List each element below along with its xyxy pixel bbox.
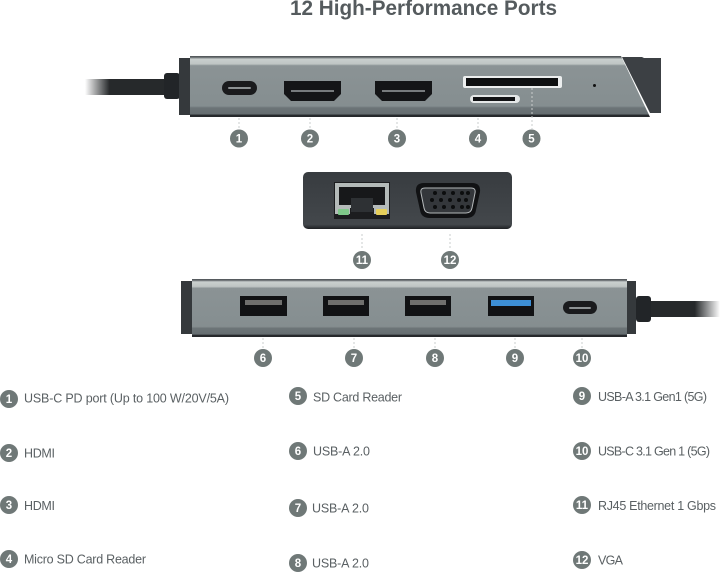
legend item 12 <box>573 551 624 569</box>
leader lines: top device <box>239 88 532 129</box>
legend item 12: VGA <box>598 554 624 568</box>
cable: left <box>85 79 167 95</box>
end cap: right <box>626 281 636 334</box>
badge 6: 6 <box>260 353 266 365</box>
port: SD card reader <box>463 76 562 88</box>
port: USB-A 3.1 blue <box>488 296 534 316</box>
badge 7 <box>345 349 363 367</box>
badge 2 <box>301 130 319 148</box>
legend item 9 <box>573 387 707 405</box>
legend item 10 <box>573 442 710 460</box>
badge 5 <box>522 130 540 148</box>
legend item 5: SD Card Reader <box>313 390 402 404</box>
badge 9 <box>506 349 524 367</box>
legend item 10: 10 <box>576 446 588 458</box>
legend item 8: 8 <box>295 558 302 570</box>
legend item 7: USB-A 2.0 <box>312 502 369 516</box>
housing <box>192 279 627 337</box>
legend item 7: 7 <box>295 503 301 515</box>
legend item 2 <box>0 444 55 462</box>
port: USB-C <box>563 301 597 314</box>
legend item 6 <box>289 442 370 460</box>
badge 4 <box>469 130 487 148</box>
legend item 1 <box>0 390 229 408</box>
legend item 10: USB-C 3.1 Gen 1 (5G) <box>598 444 710 458</box>
port: USB-A 2.0 <box>323 296 369 316</box>
end cap: left <box>179 58 191 115</box>
leader lines: middle device <box>362 234 450 250</box>
legend item 1: 1 <box>6 394 13 406</box>
port: HDMI <box>375 81 432 101</box>
legend item 9: 9 <box>579 391 585 403</box>
legend item 12: 12 <box>576 555 588 567</box>
badge 12: 12 <box>444 255 456 267</box>
legend item 8 <box>289 554 369 572</box>
badge 10 <box>573 349 591 367</box>
legend item 5 <box>289 387 402 405</box>
badge 5: 5 <box>528 134 535 146</box>
housing <box>303 172 512 229</box>
port: USB-C <box>222 81 257 95</box>
legend item 4: Micro SD Card Reader <box>24 552 146 566</box>
port: HDMI <box>284 81 341 101</box>
badge 4: 4 <box>475 134 482 146</box>
badge 11: 11 <box>356 255 369 267</box>
legend item 4 <box>0 550 146 568</box>
badge 6 <box>254 349 272 367</box>
legend item 2: HDMI <box>24 446 55 460</box>
device: middle end view <box>303 172 512 229</box>
legend item 1: USB-C PD port (Up to 100 W/20V/5A) <box>24 392 229 406</box>
right end cap <box>622 57 661 113</box>
badge 3: 3 <box>394 134 400 146</box>
strain relief: right <box>636 296 651 322</box>
port: USB-A 2.0 <box>405 296 451 316</box>
housing <box>190 56 650 117</box>
port: VGA <box>416 183 480 218</box>
legend item 8: USB-A 2.0 <box>312 556 369 570</box>
legend item 11: 11 <box>576 500 589 512</box>
legend item 6: USB-A 2.0 <box>313 444 370 458</box>
badge 12 <box>441 251 459 269</box>
badge 3 <box>388 130 406 148</box>
LED indicator <box>593 84 596 87</box>
legend item 2: 2 <box>6 448 12 460</box>
legend item 6: 6 <box>295 446 301 458</box>
legend item 7 <box>289 499 369 517</box>
badge 1 <box>230 130 248 148</box>
leader lines: bottom device <box>263 338 582 348</box>
port: micro SD reader <box>470 95 520 103</box>
legend item 11: RJ45 Ethernet 1 Gbps <box>598 499 716 513</box>
badge 8 <box>426 349 444 367</box>
device: bottom side view <box>181 279 720 337</box>
legend item 3: 3 <box>6 500 12 512</box>
legend item 3 <box>0 496 55 514</box>
legend item 11 <box>573 496 716 514</box>
end cap: left <box>181 281 193 334</box>
badge 7: 7 <box>351 353 357 365</box>
badge 2: 2 <box>307 134 313 146</box>
port: RJ45 Ethernet <box>334 182 390 219</box>
badge 9: 9 <box>512 353 518 365</box>
legend item 4: 4 <box>6 554 13 566</box>
port: USB-A 2.0 <box>240 296 287 316</box>
badge 8: 8 <box>432 353 439 365</box>
badge 1: 1 <box>236 134 243 146</box>
badge 11 <box>353 251 371 269</box>
legend item 5: 5 <box>295 391 302 403</box>
strain relief: left <box>164 73 180 99</box>
legend item 9: USB-A 3.1 Gen1 (5G) <box>598 390 707 404</box>
device: top side view <box>85 56 661 117</box>
legend item 3: HDMI <box>24 499 55 513</box>
cable: right <box>648 301 720 317</box>
badge 10: 10 <box>576 353 588 365</box>
